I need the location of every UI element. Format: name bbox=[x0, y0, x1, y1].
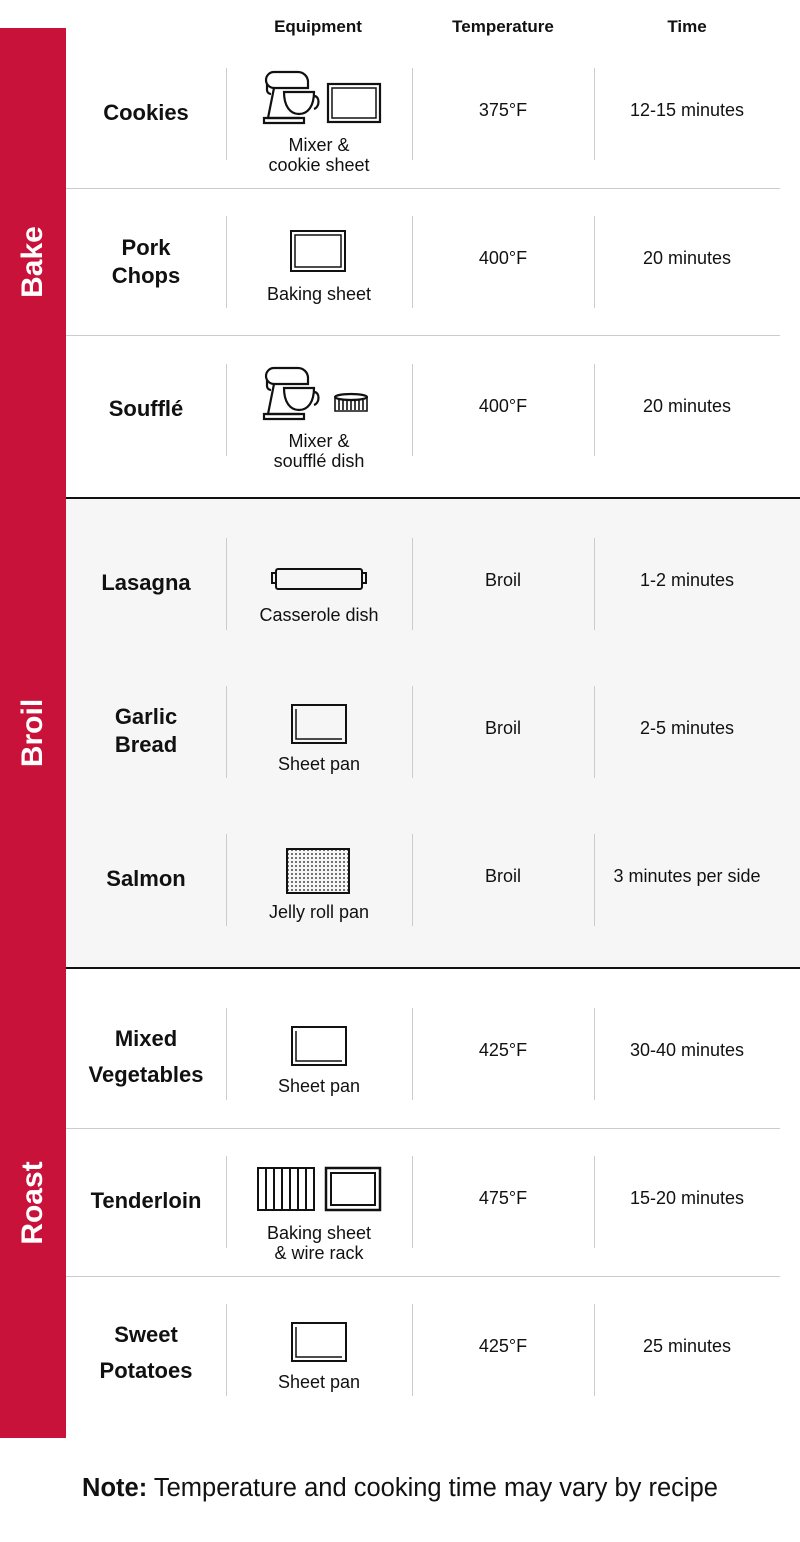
sidebar: roast: Roast bbox=[16, 1161, 49, 1245]
text: Baking sheet bbox=[267, 284, 371, 304]
row: pork chops: Pork bbox=[122, 235, 170, 260]
text: Casserole dish bbox=[259, 605, 379, 625]
text: 1-2 minutes bbox=[640, 570, 734, 590]
text: 25 minutes bbox=[643, 1336, 731, 1356]
sidebar: broil bbox=[0, 497, 66, 968]
text: Jelly roll pan bbox=[269, 902, 369, 922]
icon: wire rack and baking sheet bbox=[257, 1166, 382, 1212]
header: temperature: Temperature bbox=[452, 17, 554, 36]
text: Sheet pan bbox=[278, 1372, 360, 1392]
header: equipment: Equipment bbox=[274, 17, 362, 36]
sidebar: roast bbox=[0, 968, 66, 1438]
icon: casserole dish bbox=[271, 568, 367, 590]
text: 400°F bbox=[479, 248, 527, 268]
row: sweet potatoes bbox=[100, 1322, 192, 1383]
text: 475°F bbox=[479, 1188, 527, 1208]
text: 2-5 minutes bbox=[640, 718, 734, 738]
row: garlic bread: Garlic bbox=[115, 704, 177, 729]
row: mixed vegetables bbox=[88, 1026, 203, 1087]
sidebar: bake bbox=[0, 28, 66, 497]
row: salmon: Salmon bbox=[106, 866, 186, 891]
text: 400°F bbox=[479, 396, 527, 416]
equipment text bbox=[268, 135, 370, 175]
text: Broil bbox=[485, 570, 521, 590]
row: souffle: Soufflé bbox=[109, 396, 183, 421]
sidebar: broil: Broil bbox=[16, 699, 49, 767]
text: & wire rack bbox=[274, 1243, 364, 1263]
row: tenderloin: Tenderloin bbox=[91, 1188, 201, 1213]
row: mixed vegetables: Mixed bbox=[115, 1026, 177, 1051]
temp: 375°F bbox=[479, 100, 527, 120]
text: 425°F bbox=[479, 1040, 527, 1060]
icon: baking sheet bbox=[290, 230, 346, 272]
panel: broil background bbox=[66, 497, 800, 968]
row: mixed vegetables: Vegetables bbox=[89, 1062, 203, 1087]
icon: mixer and souffle dish bbox=[262, 366, 368, 420]
icon: sheet pan bbox=[291, 704, 347, 744]
text: Mixer & bbox=[288, 431, 350, 451]
row: cookies: Cookies bbox=[103, 100, 189, 125]
text: 20 minutes bbox=[643, 248, 731, 268]
text: Broil bbox=[485, 866, 521, 886]
text: 30-40 minutes bbox=[630, 1040, 744, 1060]
time: 12-15 minutes bbox=[630, 100, 744, 120]
header: time: Time bbox=[667, 17, 707, 36]
note: Note: Temperature and cooking time may vary by recipe bbox=[82, 1474, 718, 1502]
text: Baking sheet bbox=[267, 1223, 371, 1243]
row: sweet potatoes: Potatoes bbox=[100, 1358, 192, 1383]
text: Sheet pan bbox=[278, 754, 360, 774]
text: 3 minutes per side bbox=[613, 866, 761, 886]
text: 20 minutes bbox=[643, 396, 731, 416]
sidebar: bake: Bake bbox=[16, 226, 49, 298]
text: 425°F bbox=[479, 1336, 527, 1356]
equipment text: cookie sheet bbox=[268, 155, 370, 175]
row: pork chops: Chops bbox=[112, 263, 180, 288]
text: 15-20 minutes bbox=[630, 1188, 744, 1208]
icon: sheet pan bbox=[291, 1026, 347, 1066]
text: soufflé dish bbox=[274, 451, 364, 471]
icon: mixer and cookie sheet bbox=[262, 70, 382, 124]
row: garlic bread bbox=[115, 704, 177, 757]
equipment text: Mixer & bbox=[288, 135, 350, 155]
row: lasagna: Lasagna bbox=[101, 570, 191, 595]
text: Broil bbox=[485, 718, 521, 738]
row: garlic bread: Bread bbox=[115, 732, 177, 757]
text: Sheet pan bbox=[278, 1076, 360, 1096]
icon: sheet pan bbox=[291, 1322, 347, 1362]
row: sweet potatoes: Sweet bbox=[114, 1322, 178, 1347]
row: pork chops bbox=[112, 235, 180, 288]
icon: jelly roll pan bbox=[286, 848, 350, 894]
